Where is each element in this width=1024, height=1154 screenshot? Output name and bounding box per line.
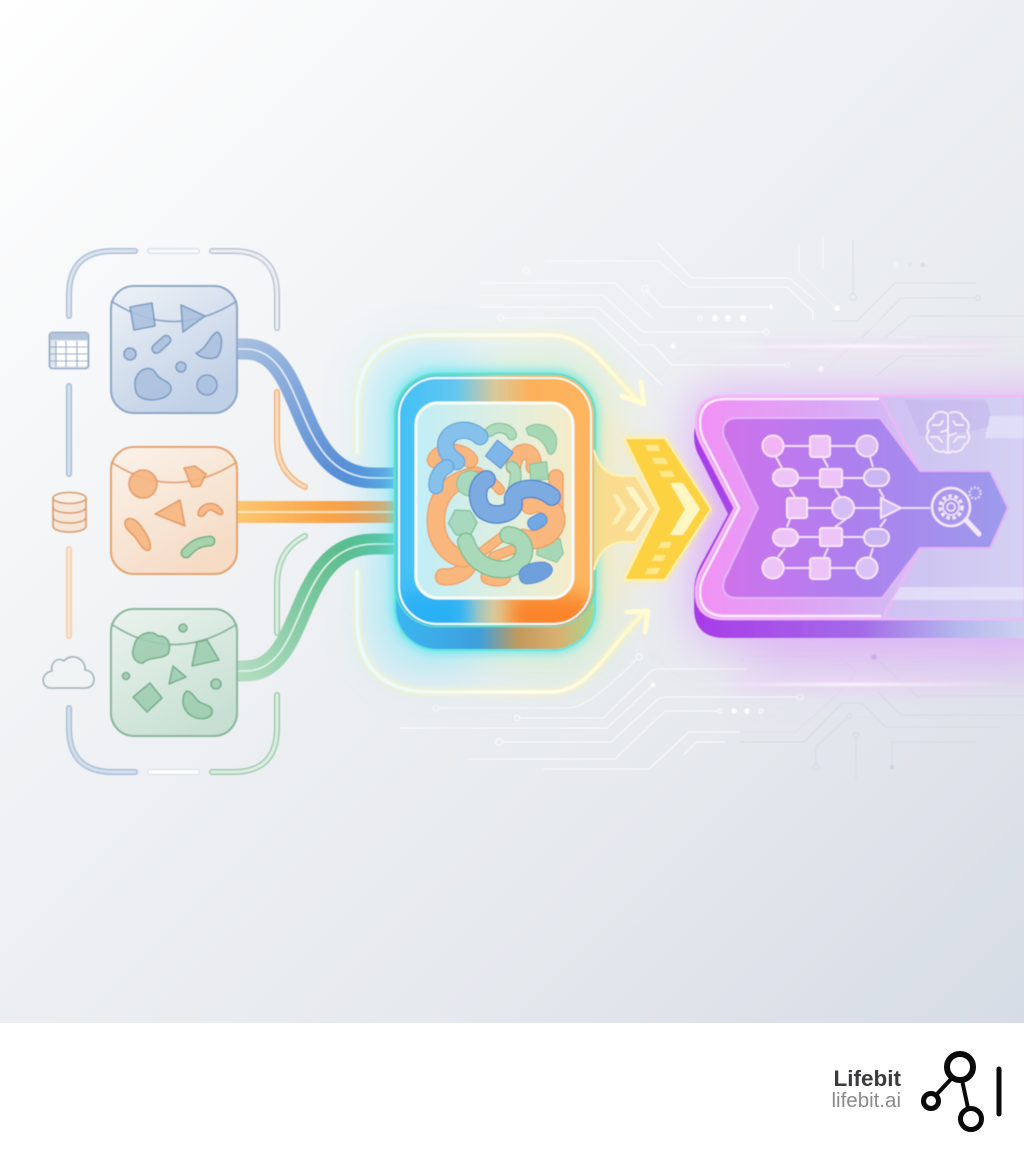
brand url: lifebit.ai <box>831 1089 901 1112</box>
box front <box>395 374 595 626</box>
icon: database <box>53 492 86 532</box>
node row 4 <box>773 528 889 546</box>
bracket: top right <box>212 251 277 328</box>
data silo: orange <box>111 447 237 574</box>
data silo: green <box>111 609 237 736</box>
processed data bar <box>694 396 1024 638</box>
box glow rim <box>392 370 598 653</box>
side line: orange <box>66 549 72 636</box>
tangled data shapes <box>435 424 563 584</box>
orange big C <box>436 476 477 558</box>
orange cross stripe <box>480 533 520 557</box>
right lobes <box>880 397 1024 619</box>
green square <box>529 462 548 481</box>
circuit traces: lower right <box>400 654 1024 780</box>
brand name: Lifebit <box>834 1066 901 1091</box>
side line: blue <box>66 386 72 474</box>
bracket: bottom middle <box>150 769 197 775</box>
harmonising box <box>392 370 598 653</box>
icon: table <box>50 332 88 368</box>
node row 2 <box>773 469 889 487</box>
small chevrons <box>625 487 648 531</box>
node row 3 <box>787 497 901 519</box>
bracket: top middle <box>150 248 197 254</box>
icon: brain <box>927 412 969 453</box>
light flare: top <box>700 342 1020 350</box>
glow behind processed data bar <box>690 390 1024 674</box>
flow arrow: top <box>357 335 644 452</box>
blue capsule <box>436 467 447 487</box>
blue S <box>478 479 552 515</box>
blue hook <box>446 430 480 462</box>
bracket: top left <box>69 251 135 316</box>
blue diamond <box>485 440 513 469</box>
accent line: orange <box>277 392 305 487</box>
box base <box>395 393 595 650</box>
data silo: blue <box>111 286 237 413</box>
connector pipe: orange <box>236 501 396 523</box>
inner panel <box>723 418 1008 598</box>
footer band <box>0 1023 1024 1154</box>
blue rounded block <box>519 562 552 584</box>
node row 1 <box>762 436 878 457</box>
icon: cloud <box>43 657 94 688</box>
circuit traces: upper right <box>480 237 1024 385</box>
bracket: bottom left <box>69 708 135 772</box>
orange hook <box>523 503 556 540</box>
bracket: bottom right <box>212 695 277 772</box>
accent line: green <box>277 536 305 633</box>
connector neck: box to chevron <box>594 450 656 570</box>
illustration <box>43 237 1024 780</box>
logo mark <box>924 1054 999 1130</box>
green big C <box>466 535 524 569</box>
box front shading <box>398 590 590 636</box>
bar face <box>696 396 1024 619</box>
glow behind harmonising box <box>372 352 620 672</box>
main chevron arrow <box>623 438 712 580</box>
green hexagon <box>448 510 477 535</box>
workflow diagram <box>762 436 930 579</box>
connector pipe: green <box>236 544 396 671</box>
node row 5 <box>762 558 878 579</box>
outer frame brackets <box>69 251 305 772</box>
green half moon <box>526 424 557 454</box>
connector pipe: blue <box>236 349 396 478</box>
box window <box>416 403 573 598</box>
blue capsule small <box>525 511 549 532</box>
green trapezoid <box>537 538 563 562</box>
flow arrow: bottom <box>357 572 648 692</box>
light flare: bottom <box>690 680 1010 688</box>
bar base <box>694 407 1024 638</box>
icon: magnifier with gear <box>932 488 980 534</box>
green blob <box>457 471 483 496</box>
